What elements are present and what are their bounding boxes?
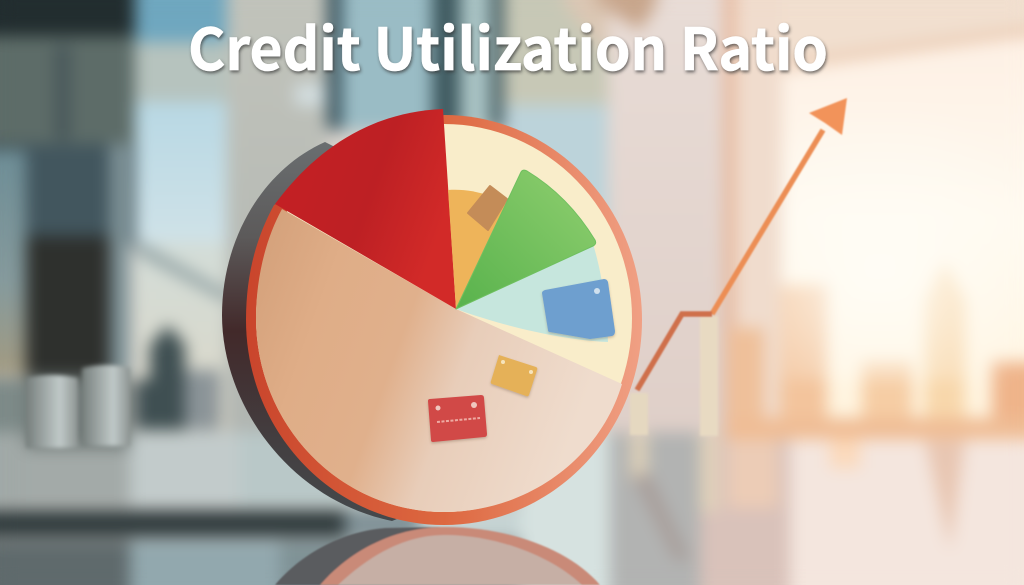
pillars under arrow <box>630 316 718 436</box>
icon: blue card <box>542 279 615 339</box>
orange slice <box>448 190 506 309</box>
central columns <box>227 0 650 440</box>
left dark glass panes <box>0 0 135 376</box>
skyline buildings <box>726 262 1024 440</box>
peach slice <box>256 209 622 512</box>
disc side <box>222 142 445 521</box>
icon: red card <box>428 395 487 442</box>
cream slice <box>256 124 632 512</box>
title: Credit Utilization Ratio <box>188 3 828 87</box>
pie chart <box>222 109 642 525</box>
right columns and ceiling <box>590 0 1024 440</box>
window sky <box>135 0 227 437</box>
disc outer ring <box>246 115 642 525</box>
red slice <box>275 109 456 309</box>
pie reflection on table <box>275 527 600 585</box>
rising trend arrow <box>637 98 847 390</box>
icon: yellow card <box>491 355 537 396</box>
icon: brown card <box>468 186 507 230</box>
light teal slice <box>456 244 608 342</box>
green slice <box>456 170 596 309</box>
glass cylinders on table <box>26 365 130 448</box>
table surface <box>0 376 1024 585</box>
